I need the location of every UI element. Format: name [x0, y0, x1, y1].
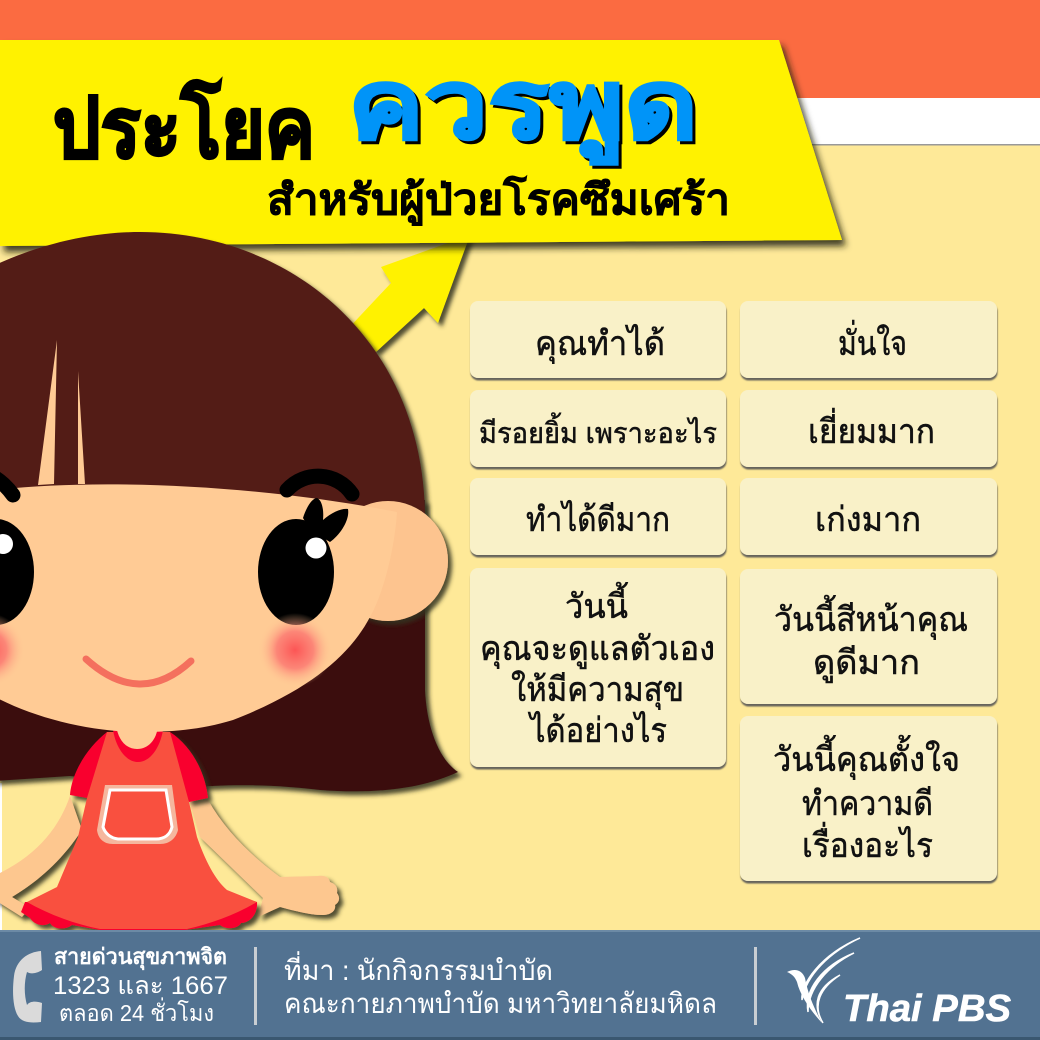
left eye: [0, 519, 34, 625]
right eye highlight: [306, 538, 326, 558]
white band: [780, 98, 1040, 146]
card 5: ทำได้ดีมาก: [526, 500, 670, 539]
hair lower: [0, 500, 458, 791]
footer bar: [0, 930, 1040, 1040]
card 1: คุณทำได้: [535, 324, 665, 364]
card 4: เยี่ยมมาก: [808, 408, 935, 451]
dress: [27, 732, 257, 929]
title: ควรพูด: ควรพูด: [351, 55, 701, 168]
card 5: [470, 478, 726, 555]
arrow: [345, 235, 470, 352]
card 7: ได้อย่างไร: [527, 711, 667, 750]
hem: [21, 902, 257, 930]
card 8: [740, 569, 997, 704]
icon: phone: [13, 951, 42, 1022]
logo: Thai PBS: Thai PBS: [843, 988, 1011, 1030]
card 7: วันนี้: [565, 582, 629, 626]
hotline text: สายด่วนสุขภาพจิต: [54, 944, 227, 971]
card 2: มั่นใจ: [838, 320, 907, 363]
right eyebrow: [287, 476, 352, 494]
banner: [0, 40, 842, 246]
source text: ที่มา : นักกิจกรรมบำบัด: [284, 951, 553, 986]
left eye highlight: [0, 534, 13, 554]
divider: [754, 947, 757, 1025]
character: [0, 232, 458, 930]
top orange band: [0, 0, 1040, 98]
card 6: เก่งมาก: [815, 501, 921, 539]
card 4: [740, 390, 997, 467]
fringe gaps: [38, 340, 85, 485]
collar: [113, 730, 163, 762]
left arm: [0, 796, 82, 917]
right eye lashes: [303, 498, 348, 542]
logo: Thai PBS: [787, 938, 1011, 1030]
hotline text: [53, 944, 228, 1026]
pocket: [97, 785, 178, 844]
ear: [328, 501, 448, 621]
card 2: [740, 301, 997, 378]
card 6: [740, 478, 997, 555]
face: [0, 484, 397, 732]
card 3: มีรอยยิ้ม เพราะอะไร: [479, 412, 717, 450]
card 7: [470, 568, 726, 767]
left blush: [0, 613, 25, 687]
card 7: คุณจะดูแลตัวเอง: [480, 630, 715, 669]
card 1: [470, 301, 726, 378]
mouth: [86, 659, 191, 684]
right eye: [258, 519, 334, 625]
sleeves: [70, 732, 208, 802]
source text: คณะกายภาพบำบัด มหาวิทยาลัยมหิดล: [284, 988, 717, 1019]
title: ควรพูด: ควรพูด: [348, 52, 698, 165]
subtitle: สำหรับผู้ป่วยโรคซึมเศร้า: [267, 175, 730, 226]
card 8: ดูดีมาก: [813, 644, 920, 683]
hotline text: 1323 และ 1667: [53, 972, 228, 1000]
card 9: วันนี้คุณตั้งใจ: [773, 735, 960, 780]
card 8: วันนี้สีหน้าคุณ: [774, 595, 968, 640]
card 9: เรื่องอะไร: [802, 822, 933, 865]
title: ประโยค: ประโยค: [53, 80, 315, 175]
right blush: [258, 613, 332, 687]
card 7: ให้มีความสุข: [511, 670, 684, 710]
left eyebrow: [0, 476, 13, 495]
card 9: [740, 716, 997, 881]
hotline text: ตลอด 24 ชั่วโมง: [59, 997, 214, 1026]
hair upper: [0, 232, 425, 560]
neck: [116, 725, 158, 749]
card 3: [470, 390, 726, 467]
source text: [284, 951, 717, 1019]
card 9: ทำความดี: [802, 785, 933, 823]
divider: [254, 947, 257, 1025]
right arm: [189, 800, 339, 917]
